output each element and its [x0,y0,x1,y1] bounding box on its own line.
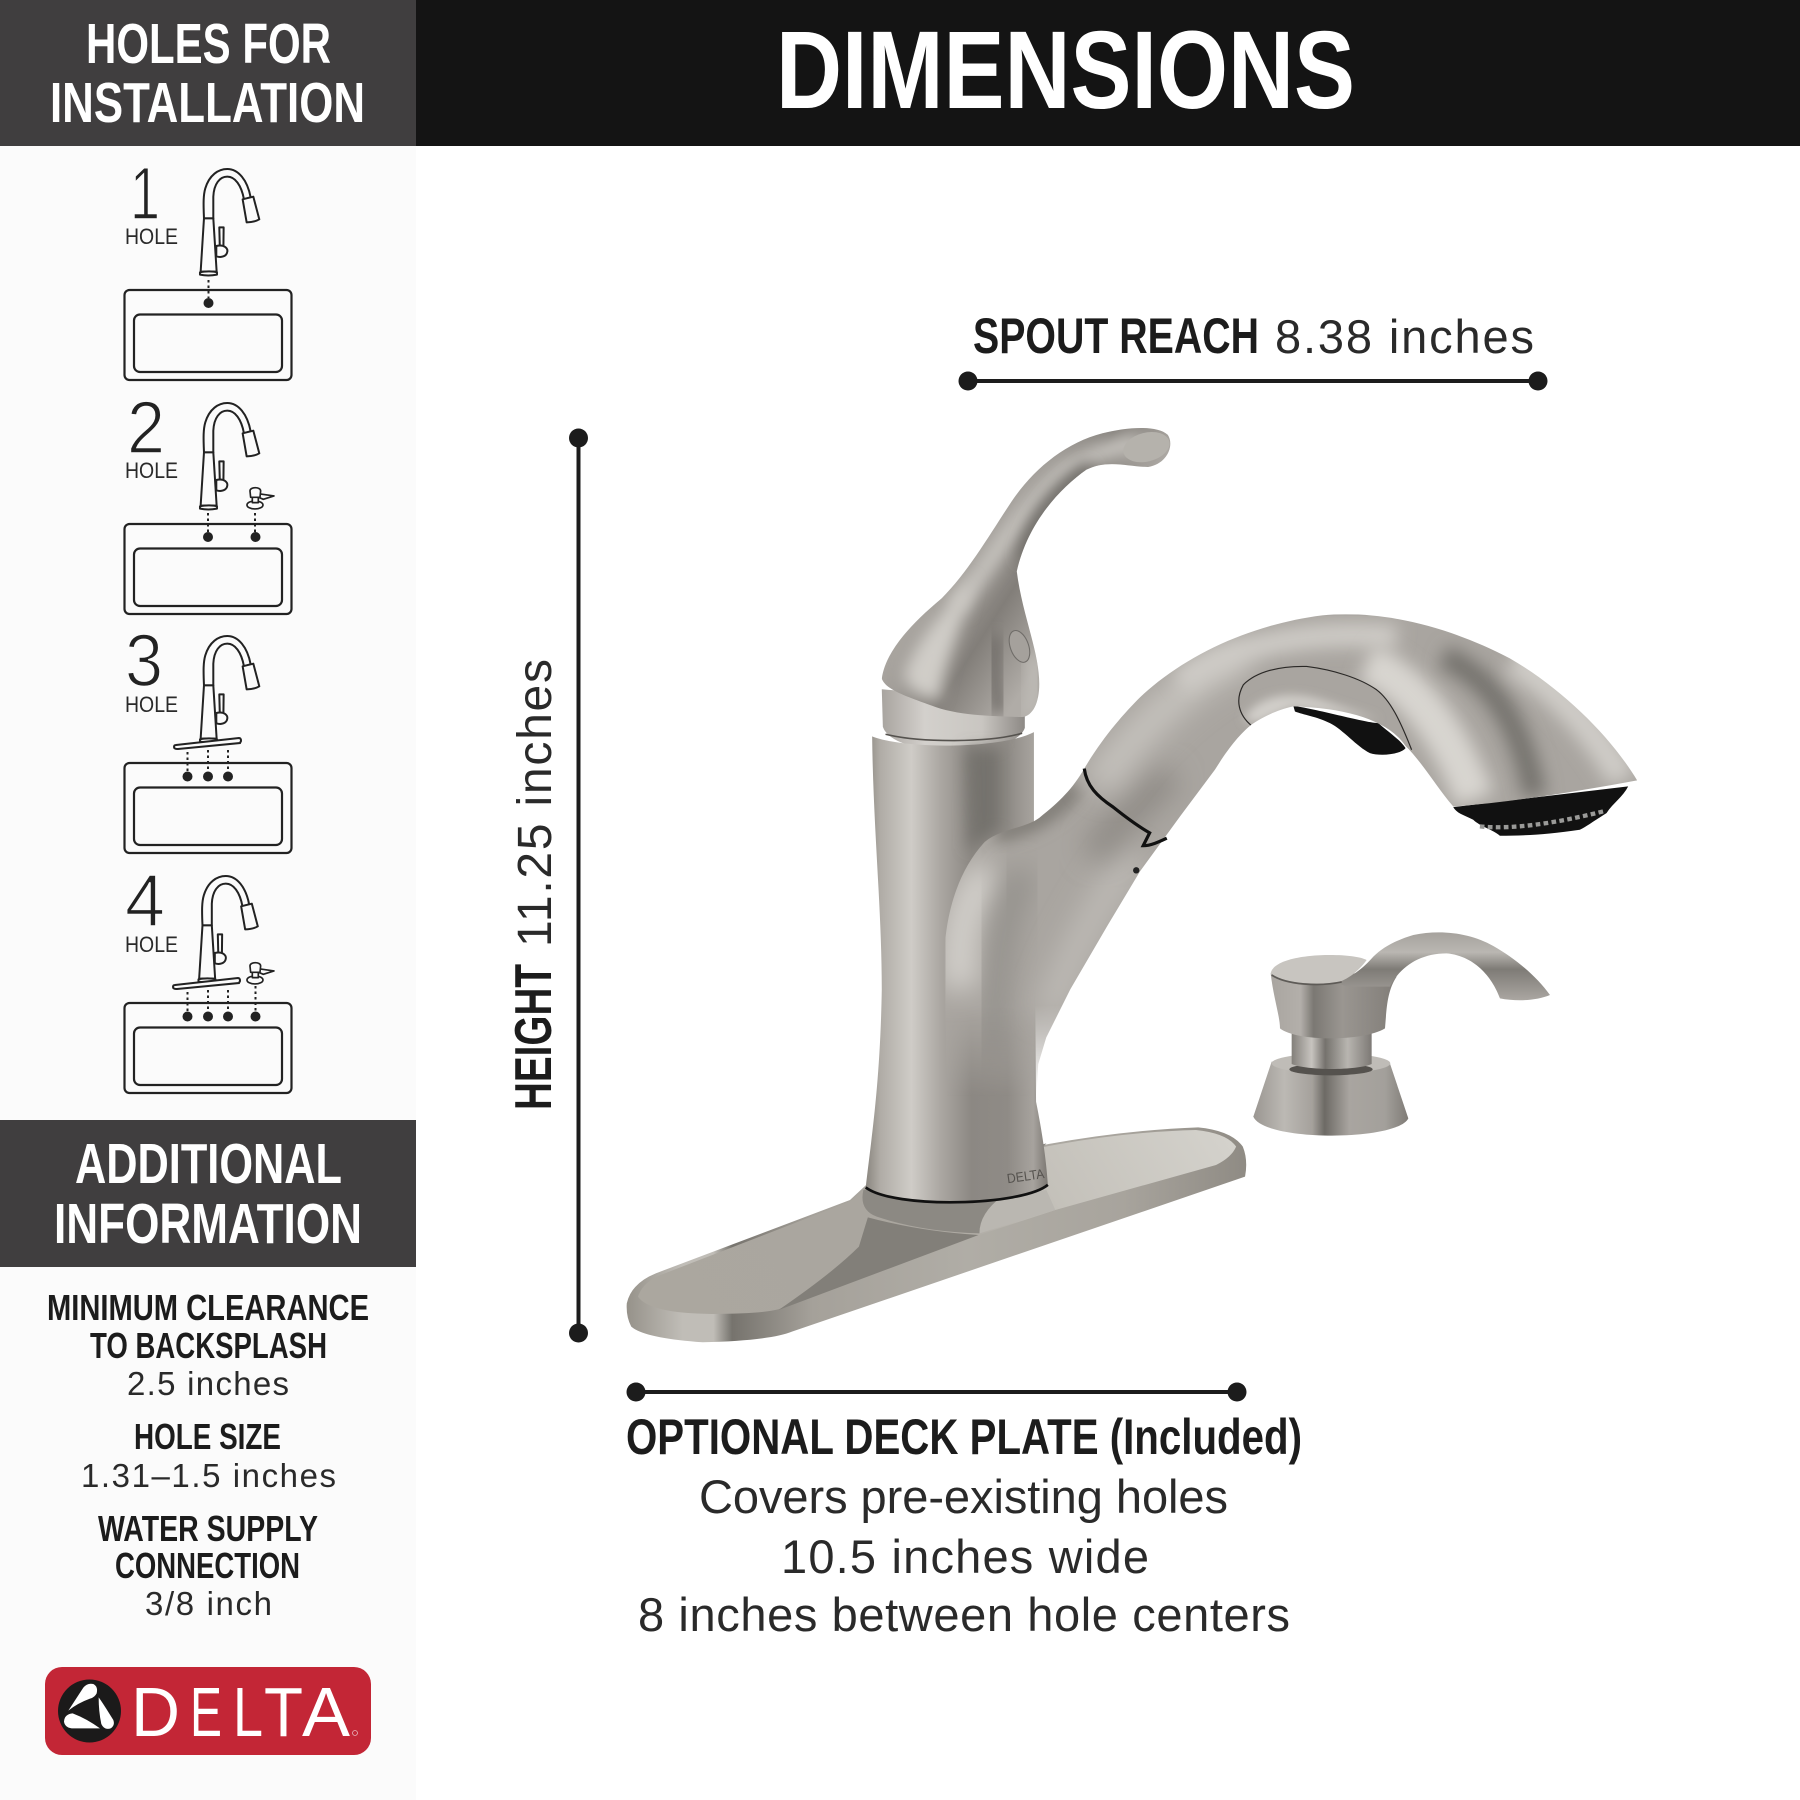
spout with neck, shaded [946,614,1637,1088]
icon group: 2 hole: 2 [127,386,165,469]
column shadow above spout [966,748,1001,850]
info: minimum clearance: 2.5 inches [127,1365,289,1402]
icon group: 4 hole [124,859,292,1093]
title: DIMENSIONS: DIMENSIONS [776,9,1355,132]
icon group: 4 hole: HOLE [125,932,178,957]
recess [1356,680,1398,721]
icon group: 1 hole [124,152,292,380]
info: water supply connection [98,1508,318,1622]
info: water supply connection: CONNECTION [115,1545,300,1586]
deck plate [627,1127,1246,1342]
dimension: optional deck plate [626,1382,1302,1641]
heading: additional information: ADDITIONAL [75,1132,342,1196]
faucet column [866,732,1048,1202]
spray face [1453,786,1628,836]
logo: Delta: E [190,1673,222,1751]
handle neck [882,689,1025,751]
dimension: height [505,428,588,1342]
dimension: optional deck plate: 8 inches between hole centers [638,1588,1290,1641]
spout and body group: DELTA [1006,1166,1045,1186]
icon group: 3 hole [124,619,292,853]
info: minimum clearance: MINIMUM CLEARANCE [47,1287,369,1328]
title bar [416,0,1800,146]
logo: Delta: A [302,1673,350,1751]
neck shading [959,871,993,989]
info: hole size: 1.31–1.5 inches [81,1457,336,1494]
icon group: 1 hole: 1 [130,152,160,235]
dimension: optional deck plate: 10.5 inches wide [781,1530,1149,1583]
heading: holes for installation [0,0,416,146]
heading: additional information [0,1120,416,1267]
heading: additional information: INFORMATION [54,1192,362,1256]
info: minimum clearance [47,1287,369,1402]
info: hole size [81,1416,336,1494]
faucet product image [627,416,1670,1342]
soap dispenser [1253,932,1550,1136]
logo: Delta [45,1667,371,1755]
info: water supply connection: 3/8 inch [145,1585,272,1622]
dimension: spout reach: SPOUT REACH [973,308,1259,364]
spout and body group [866,416,1670,1202]
icon group: 2 hole [124,386,292,614]
icon group: 1 hole: HOLE [125,224,178,249]
dimension: height: HEIGHT [505,964,563,1110]
icon group: 2 hole: HOLE [125,458,178,483]
logo: Delta: D [131,1673,180,1751]
info: minimum clearance: TO BACKSPLASH [90,1325,327,1366]
logo: Delta: T [264,1673,303,1751]
icon group: 3 hole: 3 [125,619,163,702]
dimension: height: 11.25 inches [509,659,562,947]
base ring [866,1185,1048,1202]
heading: holes for installation: HOLES FOR [86,12,331,76]
logo: Delta: L [233,1673,263,1751]
dimension: spout reach [958,308,1548,390]
info: hole size: HOLE SIZE [134,1416,281,1457]
sidebar background [0,0,416,1800]
heading: holes for installation: INSTALLATION [50,71,365,135]
info: water supply connection: WATER SUPPLY [98,1508,318,1549]
arch shading [1097,654,1247,786]
dimension: optional deck plate: Covers pre-existing holes [699,1470,1228,1523]
icon group: 3 hole: HOLE [125,692,178,717]
dimension: spout reach: 8.38 inches [1275,310,1534,363]
dimension: optional deck plate: OPTIONAL DECK PLATE (Included) [626,1409,1302,1465]
lever handle [882,428,1170,717]
icon group: 4 hole: 4 [125,859,165,942]
spout seam [1084,769,1167,846]
hose [1293,706,1406,755]
